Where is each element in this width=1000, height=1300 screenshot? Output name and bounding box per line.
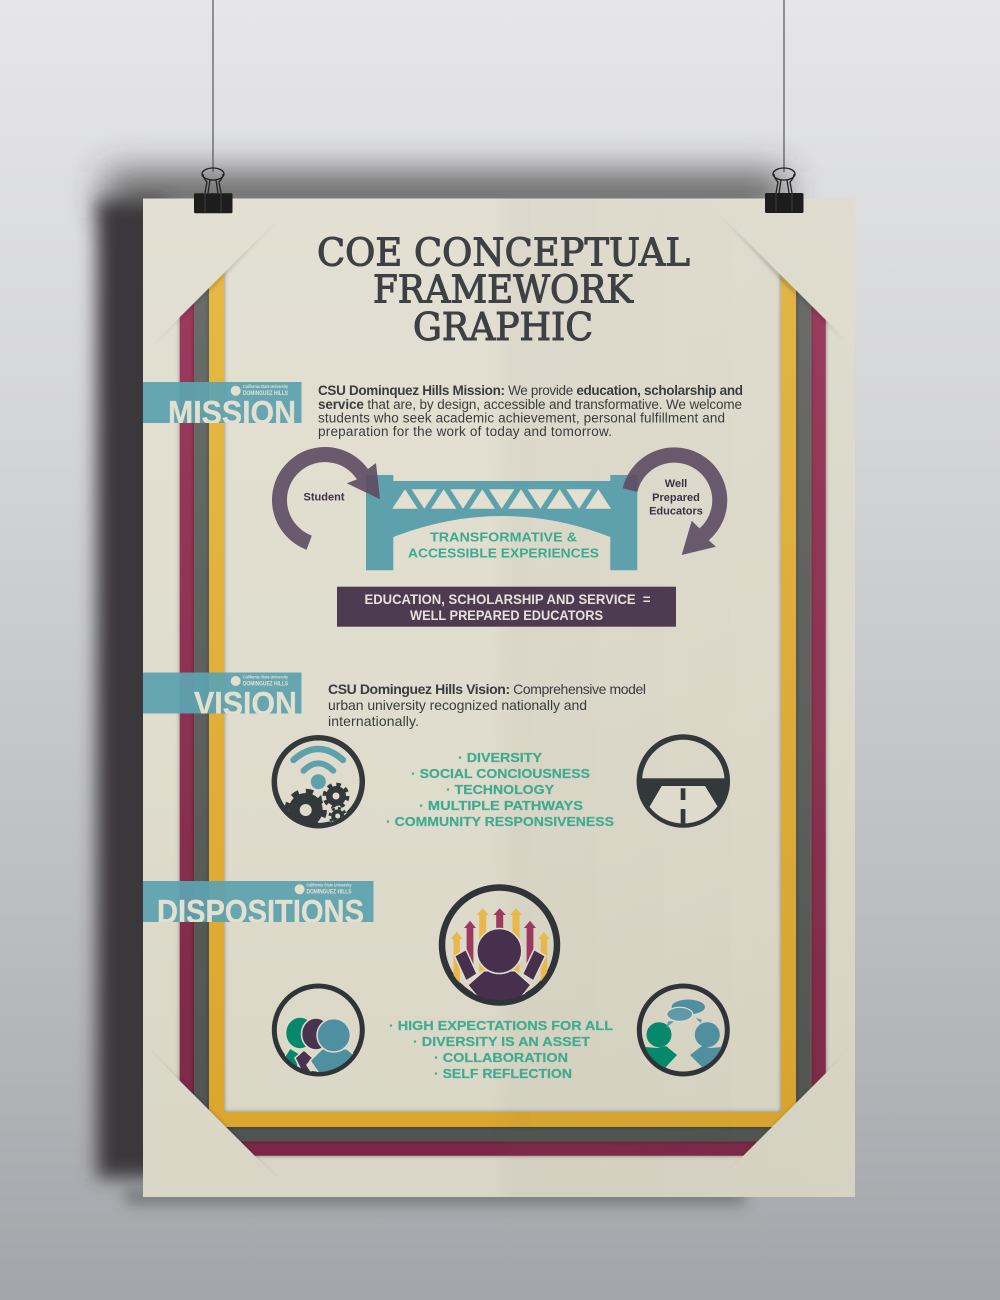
equation box: [337, 587, 676, 627]
mission statement: [318, 383, 743, 439]
bridge diagram: [272, 447, 727, 570]
dispositions list: · COLLABORATION: [434, 1050, 568, 1065]
arrow: student entering: [272, 447, 380, 550]
dispositions list: · HIGH EXPECTATIONS FOR ALL: [389, 1018, 613, 1033]
vision values list: · SOCIAL CONCIOUSNESS: [411, 766, 590, 781]
banner: vision: DOMINGUEZ HILLS: [243, 680, 288, 687]
banner: mission: MISSION: [168, 394, 296, 431]
equation box: EDUCATION, SCHOLARSHIP AND SERVICE =: [364, 592, 651, 607]
rising arrows: [451, 908, 550, 985]
icon: two people in conversation: [639, 986, 727, 1075]
banner: vision: VISION: [194, 685, 297, 722]
mission statement: preparation for the work of today and tomorrow.: [318, 424, 612, 439]
blue speaker: [690, 1022, 722, 1068]
corner fold shadows: [147, 213, 848, 1181]
banner: mission: California State University: [243, 384, 288, 389]
arrow: educators leaving: [623, 447, 727, 555]
frame stripe: gray: [202, 250, 804, 1134]
frame stripe: crimson: [187, 250, 818, 1148]
banner: mission: DOMINGUEZ HILLS: [243, 390, 288, 397]
banner: dispositions: DOMINGUEZ HILLS: [306, 888, 352, 896]
label: student: Student: [304, 492, 345, 504]
icon: person with rising arrows: [442, 888, 557, 1002]
person: [454, 928, 546, 1002]
vision values list: · DIVERSITY: [458, 750, 543, 765]
mission statement: service that are, by design, accessible and transformative. We welcome: [318, 397, 742, 412]
vision statement: internationally.: [328, 713, 419, 729]
binder clip right: [765, 168, 804, 213]
mission statement: students who seek academic achievement, personal fulfillment and: [318, 410, 725, 426]
vision statement: urban university recognized nationally and: [328, 697, 587, 713]
vision values list: [386, 750, 614, 829]
title: [317, 230, 690, 349]
corner fold: top right: [704, 198, 855, 349]
poster sheet: [143, 198, 855, 1197]
title: GRAPHIC: [413, 305, 593, 349]
speech bubbles: [666, 1000, 705, 1028]
corner fold: bottom right: [702, 1044, 855, 1197]
vision values list: · TECHNOLOGY: [446, 782, 555, 797]
dispositions list: · DIVERSITY IS AN ASSET: [413, 1034, 590, 1049]
vision values list: · COMMUNITY RESPONSIVENESS: [386, 814, 614, 829]
mission statement: CSU Dominquez Hills Mission: We provide education, scholarship and: [318, 383, 743, 398]
label: well prepared educators: [649, 478, 703, 518]
hanging string left: [212, 0, 214, 172]
dispositions list: [389, 1018, 613, 1081]
label: well prepared educators: Prepared: [652, 492, 700, 504]
corner fold: top left: [143, 198, 298, 354]
icon: road: [636, 734, 730, 828]
vision values list: · MULTIPLE PATHWAYS: [419, 798, 584, 813]
dispositions list: · SELF REFLECTION: [434, 1066, 572, 1081]
corner fold: bottom left: [143, 1044, 296, 1197]
bridge caption: [408, 530, 599, 560]
hanging string right: [783, 0, 785, 172]
label: well prepared educators: Educators: [649, 506, 703, 518]
blue person: [309, 1019, 354, 1072]
banner: dispositions: DISPOSITIONS: [157, 893, 364, 930]
bridge: [366, 475, 637, 570]
icon: group of people: [274, 986, 362, 1078]
title: FRAMEWORK: [373, 268, 634, 312]
banner: mission: [143, 382, 302, 423]
title: COE CONCEPTUAL: [317, 230, 690, 274]
green person: [284, 1018, 308, 1067]
poster crease shading: [143, 198, 855, 1197]
binder clip left: [194, 168, 232, 213]
vision statement: CSU Dominguez Hills Vision: Comprehensive model: [328, 681, 646, 697]
bridge caption: ACCESSIBLE EXPERIENCES: [408, 546, 599, 560]
poster cast shadow: [97, 172, 785, 1204]
banner: dispositions: [143, 881, 374, 922]
green speaker: [645, 1022, 677, 1068]
banner: vision: California State University: [243, 674, 288, 679]
vision statement: [328, 681, 646, 729]
banner: vision: [143, 672, 302, 714]
label: well prepared educators: Well: [665, 478, 687, 490]
banner: dispositions: California State University: [306, 882, 352, 888]
bridge truss triangles: [392, 489, 611, 509]
bridge caption: TRANSFORMATIVE &: [430, 530, 577, 544]
icon: wifi and gears: [274, 738, 362, 828]
purple person: [294, 1018, 324, 1072]
frame stripe: yellow: [216, 250, 788, 1120]
equation box: WELL PREPARED EDUCATORS: [410, 608, 603, 623]
